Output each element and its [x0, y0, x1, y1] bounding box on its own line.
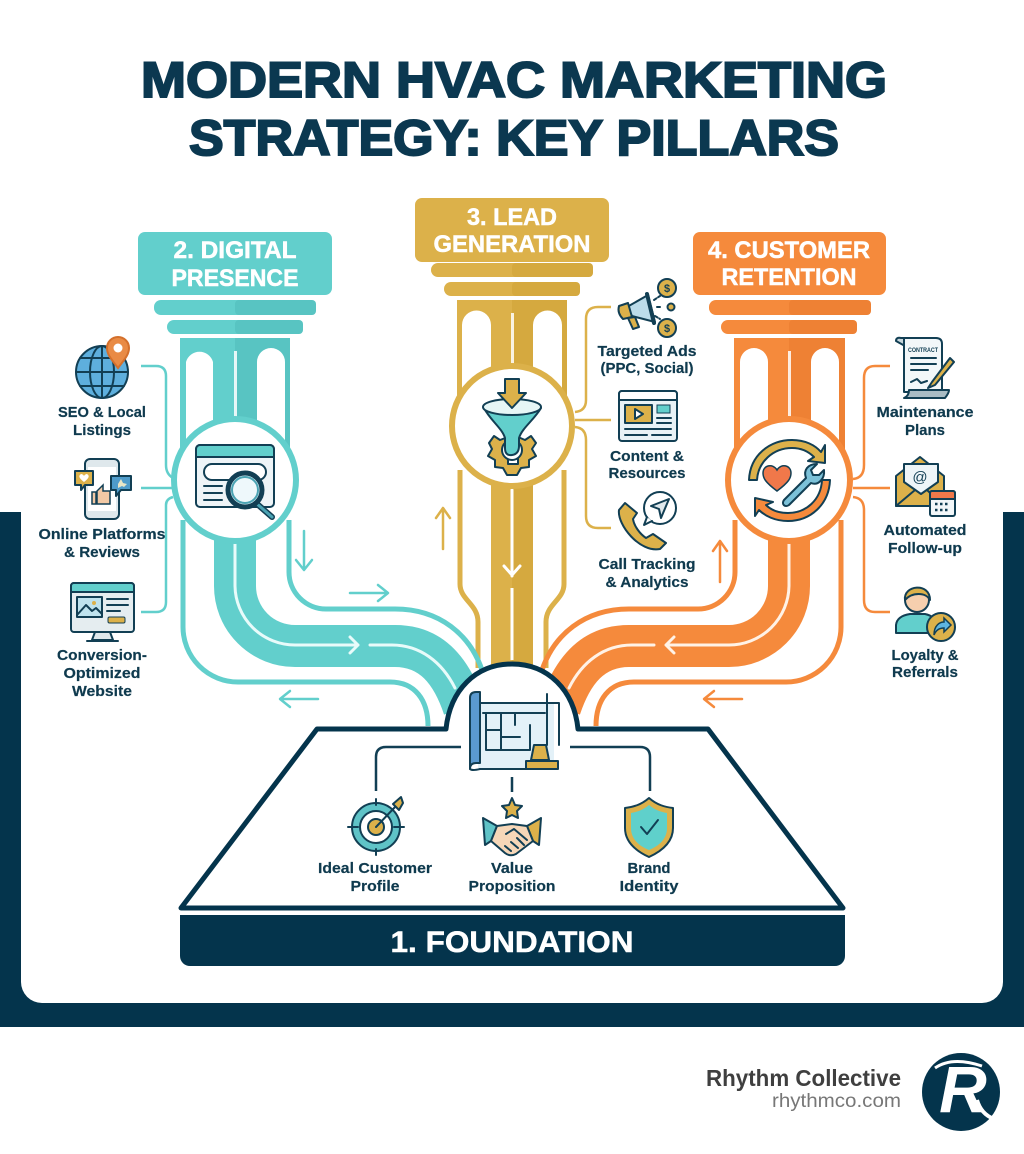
- header: digital presence: [138, 232, 332, 295]
- item: loyalty & referrals: Referrals: [892, 664, 958, 681]
- item: maintenance plans: Plans: [905, 422, 945, 439]
- header: lead generation: 3. LEAD: [467, 204, 557, 231]
- pillar 3: lead generation: [415, 198, 609, 670]
- connectors: customer retention: [853, 366, 890, 612]
- item: brand identity: Identity: [620, 878, 679, 895]
- pillar 2: digital presence: [138, 232, 482, 726]
- item: targeted ads: Targeted Ads: [598, 343, 696, 360]
- icon: content page: [619, 391, 677, 441]
- connectors: digital presence: [141, 366, 173, 612]
- item: SEO & local listings: Listings: [73, 422, 131, 439]
- header: lead generation: [415, 198, 609, 262]
- item: brand identity: [620, 798, 679, 895]
- connectors: lead generation: [575, 307, 611, 528]
- title: MODERN HVAC MARKETING: [141, 52, 887, 108]
- item: targeted ads: [598, 279, 696, 377]
- icon: phone and location bubble: [619, 492, 676, 549]
- item: automated follow-up: Automated: [884, 522, 966, 539]
- icon: handshake with star: [483, 798, 541, 855]
- item: conversion-optimized website: Conversion-: [57, 647, 147, 664]
- icon: monitor: [71, 583, 134, 641]
- icon: blueprint: [470, 692, 559, 770]
- brand text: [706, 1065, 901, 1112]
- item: content & resources: Content &: [610, 448, 684, 465]
- item: conversion-optimized website: [57, 583, 147, 700]
- icon: megaphone with coins: $: [664, 283, 670, 295]
- header: lead generation: GENERATION: [434, 231, 590, 258]
- logo: [922, 1052, 1000, 1131]
- navy frame: [0, 512, 1024, 1027]
- item: maintenance plans: Maintenance: [876, 404, 974, 421]
- icon: megaphone with coins: [618, 279, 676, 337]
- header: digital presence: PRESENCE: [172, 265, 298, 292]
- foundation banner: [180, 915, 845, 966]
- item: content & resources: Resources: [608, 465, 686, 482]
- item: call tracking & analytics: [598, 492, 696, 591]
- item: ideal customer profile: Profile: [350, 878, 400, 895]
- item: content & resources: [608, 391, 686, 482]
- item: targeted ads: (PPC, Social): [600, 360, 694, 377]
- foundation platform: [181, 664, 843, 908]
- item: brand identity: Brand: [628, 860, 670, 877]
- brand text: Rhythm Collective: [706, 1065, 901, 1091]
- item: automated follow-up: [884, 457, 966, 557]
- item: loyalty & referrals: Loyalty &: [892, 647, 959, 664]
- pillar 4: customer retention: [542, 232, 886, 726]
- item: ideal customer profile: [318, 797, 432, 895]
- icon: phone with reviews: [75, 459, 131, 519]
- item: online platforms & reviews: [38, 459, 166, 561]
- item: value proposition: Proposition: [468, 878, 556, 895]
- item: call tracking & analytics: Call Tracking: [598, 556, 696, 573]
- item: conversion-optimized website: Website: [72, 683, 132, 700]
- circle icon: funnel and gear: [452, 366, 572, 486]
- header: customer retention: RETENTION: [722, 264, 856, 291]
- icon: target: [348, 797, 404, 855]
- header: customer retention: [693, 232, 886, 295]
- item: loyalty & referrals: [892, 588, 959, 681]
- header: customer retention: 4. CUSTOMER: [708, 237, 870, 264]
- logo: R: [939, 1052, 987, 1126]
- brand text: rhythmco.com: [772, 1091, 901, 1112]
- icon: person and share: [896, 588, 955, 641]
- circle icon: retention cycle: [728, 419, 850, 541]
- icon: megaphone with coins: $: [664, 323, 670, 335]
- foundation banner: 1. FOUNDATION: [390, 926, 634, 959]
- item: maintenance plans: [876, 338, 974, 439]
- flow arrows: [280, 508, 742, 707]
- item: automated follow-up: Follow-up: [888, 540, 962, 557]
- title: STRATEGY: KEY PILLARS: [189, 110, 839, 166]
- item: online platforms & reviews: Online Platforms: [38, 526, 166, 543]
- item: SEO & local listings: SEO & Local: [58, 404, 146, 421]
- icon: envelope and calendar: @: [912, 469, 928, 486]
- title: [141, 52, 887, 166]
- header: digital presence: 2. DIGITAL: [174, 237, 296, 264]
- icon: shield: [625, 798, 673, 857]
- item: value proposition: [468, 798, 556, 895]
- icon: contract: CONTRACT: [908, 348, 938, 354]
- icon: globe with pin: [76, 337, 129, 398]
- item: SEO & local listings: [58, 337, 146, 439]
- item: call tracking & analytics: & Analytics: [606, 574, 688, 591]
- circle icon: browser search: [174, 419, 296, 541]
- item: conversion-optimized website: Optimized: [64, 665, 140, 682]
- item: online platforms & reviews: & Reviews: [64, 544, 140, 561]
- connectors: foundation: [376, 747, 650, 792]
- item: ideal customer profile: Ideal Customer: [318, 860, 432, 877]
- item: value proposition: Value: [491, 860, 533, 877]
